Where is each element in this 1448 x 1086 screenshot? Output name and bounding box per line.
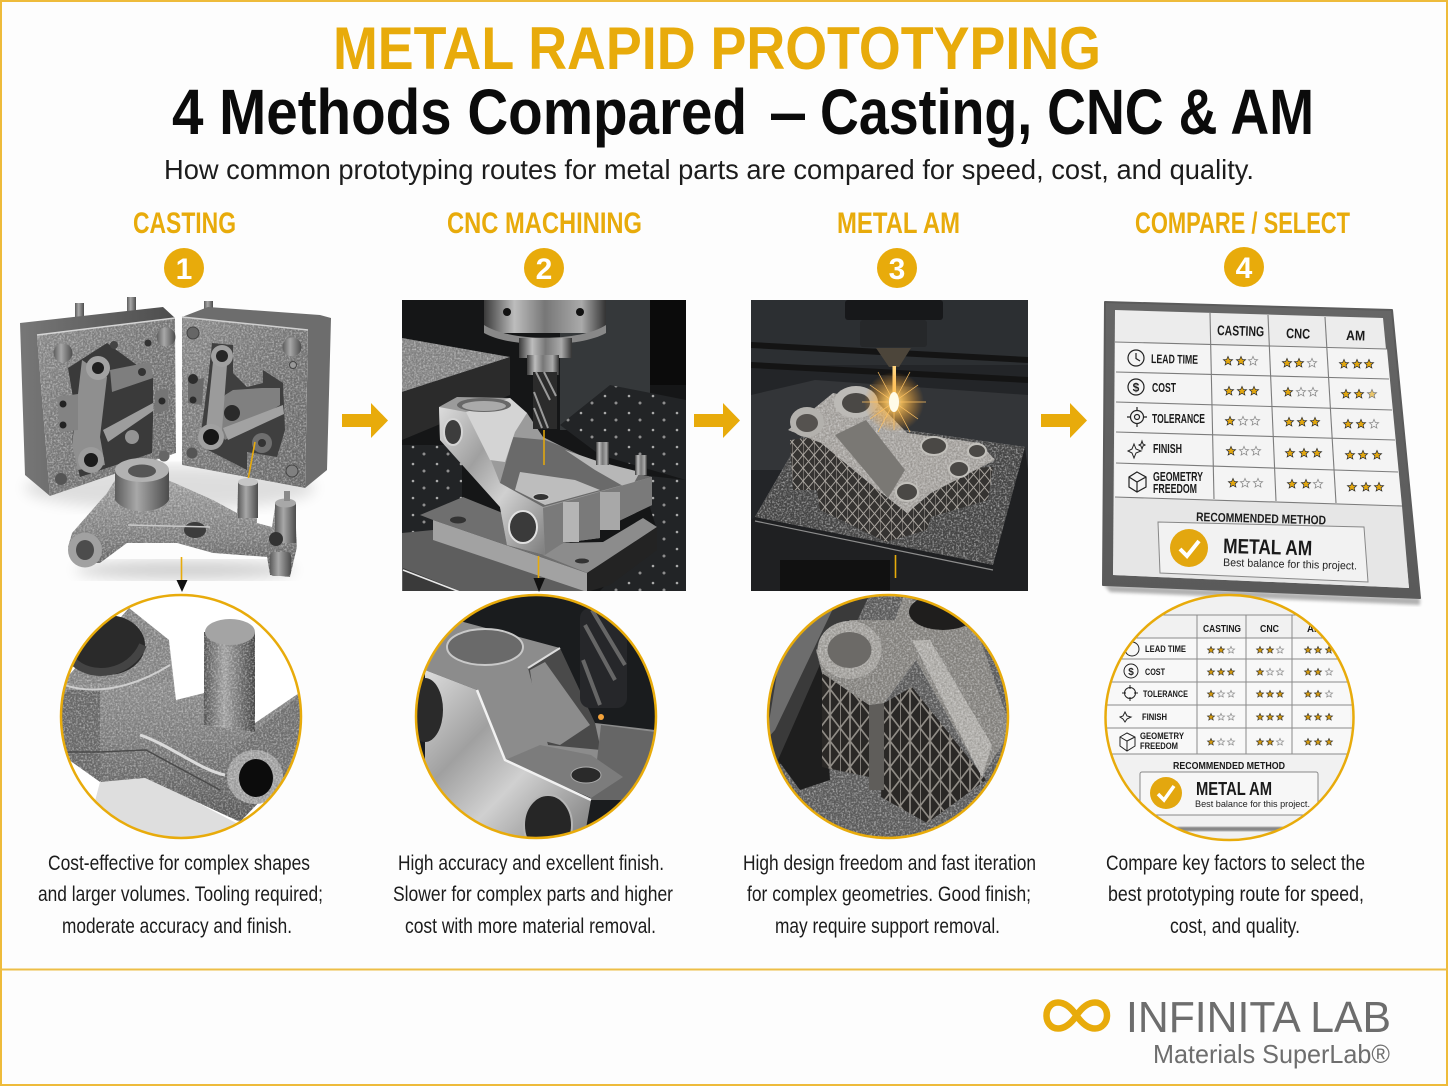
description: compare and select: best prototyping route for speed, (1108, 883, 1364, 906)
step badge 4: 4 (1236, 252, 1253, 285)
logo: Infinita Lab (1046, 993, 1391, 1069)
tagline: Materials SuperLab® (1153, 1039, 1390, 1069)
panel: compare and select (1100, 207, 1420, 938)
table column headers: CNC (1286, 325, 1310, 342)
image: laser powder bed printing (751, 300, 1028, 591)
description: metal AM: may require support removal. (775, 915, 1000, 938)
title: METAL RAPID PROTOTYPING (333, 15, 1101, 82)
detail circle: cast surface (60, 594, 305, 850)
table row labels: LEAD TIME (1151, 352, 1198, 367)
description: casting: and larger volumes. Tooling required; (38, 883, 323, 906)
description: casting (38, 852, 323, 938)
table row labels: FREEDOM (1153, 482, 1197, 496)
image: CNC milling (402, 300, 686, 592)
step badge 4 (1224, 247, 1264, 287)
image: casting mold and part (20, 297, 331, 579)
title: — (771, 76, 805, 148)
machined part (439, 397, 652, 555)
step badge 1: 1 (176, 253, 192, 286)
right mold half (182, 301, 331, 488)
wordmark: INFINITA LAB (1126, 993, 1391, 1042)
detail circle: comparison table close-up: COST (1145, 667, 1165, 677)
description: casting: moderate accuracy and finish. (62, 915, 292, 938)
panel: CNC machining (393, 207, 686, 938)
detail circle: comparison table close-up: FREEDOM (1140, 741, 1178, 751)
detail circle: machined surface (407, 594, 658, 855)
laser nozzle and spark (845, 300, 943, 432)
icon: infinity symbol (1046, 1002, 1107, 1028)
connector arrow: casting to detail (176, 557, 188, 592)
description: CNC machining: High accuracy and excellent finish. (398, 852, 664, 875)
lattice supports (790, 435, 993, 542)
table row labels: FINISH (1153, 442, 1182, 456)
heading: compare / select: COMPARE / SELECT (1135, 207, 1350, 240)
table column headers: AM (1346, 327, 1365, 344)
detail circle: comparison table close-up: METAL AM (1196, 779, 1272, 799)
description: metal AM: for complex geometries. Good finish; (747, 883, 1031, 906)
table row labels (1151, 352, 1205, 496)
title (172, 15, 1314, 148)
step badge 2 (524, 248, 564, 288)
build plate (751, 417, 1028, 591)
table row labels: GEOMETRY (1153, 470, 1203, 484)
recommended method label: RECOMMENDED METHOD (1196, 510, 1326, 527)
table column headers: CASTING (1217, 322, 1264, 339)
detail circle: comparison table close-up: CNC (1260, 623, 1279, 635)
detail circle: lattice surface (766, 594, 1010, 840)
cast part (68, 458, 297, 577)
table column headers (1217, 322, 1365, 344)
description: metal AM: High design freedom and fast iteration (743, 852, 1036, 875)
printed part (788, 386, 995, 513)
arrow: casting to CNC (342, 403, 388, 438)
table row labels: TOLERANCE (1152, 412, 1205, 426)
step badge 3: 3 (889, 253, 905, 286)
star ratings (1223, 356, 1384, 491)
detail circle: comparison table close-up: TOLERANCE (1143, 689, 1188, 699)
subtitle: How common prototyping routes for metal parts are compared for speed, cost, and quality. (164, 154, 1254, 185)
title: Casting, CNC & AM (820, 76, 1314, 148)
heading: CNC machining: CNC MACHINING (447, 207, 642, 240)
table row icons (1127, 350, 1147, 492)
recommended method box: Best balance for this project. (1223, 557, 1357, 573)
arrow: CNC to metal AM (694, 403, 740, 438)
heading: metal AM: METAL AM (837, 207, 960, 240)
description: CNC machining (393, 852, 673, 938)
description: metal AM (743, 852, 1036, 938)
table row labels: COST (1152, 381, 1176, 395)
description: compare and select: Compare key factors to select the (1106, 852, 1365, 875)
comparison board (1103, 302, 1420, 605)
panel: casting (20, 207, 331, 938)
table row icons: $ (1133, 380, 1140, 394)
description: CNC machining: Slower for complex parts and higher (393, 883, 673, 906)
step badge 1 (164, 248, 204, 288)
spindle and end mill (484, 300, 606, 429)
title: 4 Methods Compared (172, 76, 747, 148)
recommended method box (1158, 522, 1368, 582)
panel: metal AM (743, 207, 1036, 938)
detail circle: comparison table close-up: Best balance for this project. (1195, 799, 1310, 810)
heading: casting: CASTING (133, 207, 236, 240)
step badge 2: 2 (536, 253, 552, 286)
detail circle: comparison table close-up: AM (1307, 623, 1322, 635)
recommended method box: METAL AM (1223, 535, 1312, 560)
detail circle: comparison table close-up (1100, 594, 1356, 842)
detail circle: comparison table close-up: $ (1128, 667, 1134, 678)
detail circle: comparison table close-up: LEAD TIME (1145, 644, 1186, 654)
step badge 3 (877, 248, 917, 288)
arrow: metal AM to compare (1041, 403, 1087, 438)
left mold half (20, 297, 176, 496)
description: compare and select: cost, and quality. (1170, 915, 1300, 938)
table and fixture (402, 497, 657, 592)
description: CNC machining: cost with more material removal. (405, 915, 656, 938)
connector arrow: CNC to detail (534, 578, 545, 592)
description: casting: Cost-effective for complex shapes (48, 852, 310, 875)
detail circle: comparison table close-up: FINISH (1142, 712, 1167, 722)
detail circle: comparison table close-up: CASTING (1203, 623, 1241, 635)
description: compare and select (1106, 852, 1365, 938)
detail circle: comparison table close-up: RECOMMENDED METHOD (1173, 760, 1285, 772)
detail circle: comparison table close-up: GEOMETRY (1140, 731, 1184, 741)
